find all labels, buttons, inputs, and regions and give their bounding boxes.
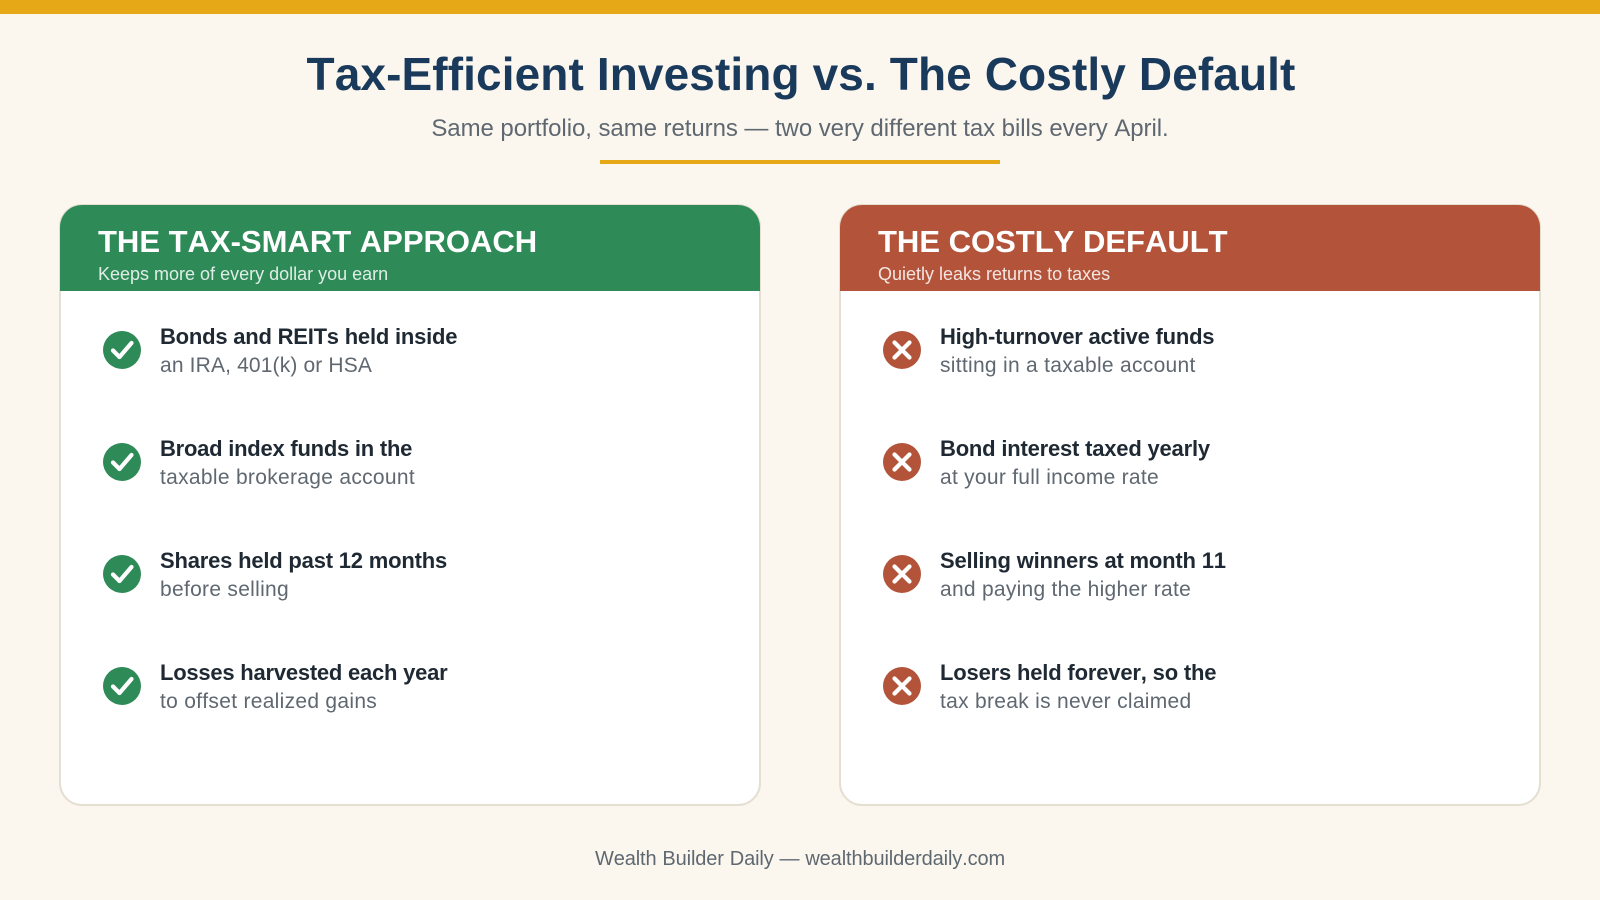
item title: Shares held past 12 months: [160, 548, 447, 573]
item: high-turnover funds: [883, 324, 1214, 377]
item detail: before selling: [160, 578, 289, 601]
item detail: taxable brokerage account: [160, 466, 415, 489]
icon: check: [103, 443, 141, 481]
item: shares held: [103, 548, 447, 601]
item title: Losers held forever, so the: [940, 660, 1216, 685]
top accent bar: [0, 0, 1600, 14]
title: Tax-Efficient Investing vs. The Costly Default: [307, 48, 1295, 100]
subheading: costly default: Quietly leaks returns to taxes: [878, 264, 1110, 284]
item title: High-turnover active funds: [940, 324, 1214, 349]
icon: check: [103, 555, 141, 593]
item title: Losses harvested each year: [160, 660, 447, 685]
icon: cross: [883, 331, 921, 369]
item detail: an IRA, 401(k) or HSA: [160, 354, 372, 377]
item title: Broad index funds in the: [160, 436, 412, 461]
footer: Wealth Builder Daily — wealthbuilderdaily.com: [595, 848, 1005, 870]
item title: Bond interest taxed yearly: [940, 436, 1210, 461]
item title: Selling winners at month 11: [940, 548, 1226, 573]
icon: cross: [883, 667, 921, 705]
icon: cross: [883, 443, 921, 481]
icon: check: [103, 667, 141, 705]
item detail: sitting in a taxable account: [940, 354, 1196, 377]
panel header: costly default: [840, 205, 1540, 291]
icon: check: [103, 331, 141, 369]
heading: costly default: THE COSTLY DEFAULT: [878, 224, 1228, 259]
item detail: tax break is never claimed: [940, 690, 1191, 713]
item: selling winners: [883, 548, 1226, 601]
icon: cross: [883, 555, 921, 593]
item detail: to offset realized gains: [160, 690, 377, 713]
subheading: tax-smart: Keeps more of every dollar you earn: [98, 264, 388, 284]
panel: tax-smart approach: [59, 204, 761, 806]
item detail: at your full income rate: [940, 466, 1159, 489]
item: index funds: [103, 436, 415, 489]
heading: tax-smart: THE TAX-SMART APPROACH: [98, 224, 537, 259]
panel: costly default: [839, 204, 1541, 806]
item title: Bonds and REITs held inside: [160, 324, 457, 349]
item detail: and paying the higher rate: [940, 578, 1191, 601]
panel header: tax-smart: [60, 205, 760, 291]
item: losses harvested: [103, 660, 448, 713]
item: bond interest: [883, 436, 1210, 489]
title rule: [600, 160, 1000, 164]
item: losers held: [883, 660, 1216, 713]
item: bonds and REITs: [103, 324, 457, 377]
subtitle: Same portfolio, same returns — two very different tax bills every April.: [431, 115, 1169, 142]
